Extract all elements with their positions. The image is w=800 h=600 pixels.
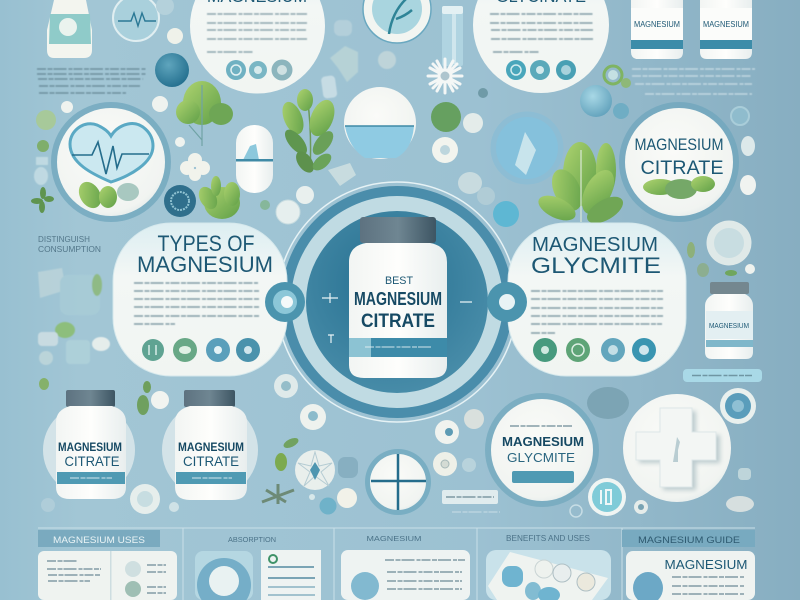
panel: magnesium glycinate bbox=[508, 223, 686, 376]
panel heading line 1: MAGNESIUM bbox=[532, 234, 658, 256]
bottle label: MAGNESIUM bbox=[634, 20, 680, 29]
icon: cyan D token bbox=[588, 478, 626, 516]
icon: leaf sprig bbox=[278, 89, 339, 176]
panel: top centre disc with leaf bbox=[363, 0, 431, 43]
top-left bottle bbox=[47, 0, 92, 58]
card bbox=[486, 550, 611, 600]
icon: heart with pulse bbox=[70, 124, 153, 182]
small token and pebble right bbox=[634, 468, 754, 514]
items below central disc bbox=[295, 404, 358, 514]
faint glyph stack left bbox=[34, 157, 48, 185]
header band bbox=[622, 530, 755, 547]
panel: top-left circle bbox=[190, 0, 325, 94]
blue pills bbox=[502, 560, 595, 600]
small pill bbox=[167, 28, 183, 44]
big blue textured disc bbox=[490, 112, 564, 184]
ring token centre-left bbox=[274, 374, 298, 398]
faint glassy icons bbox=[321, 20, 396, 99]
half-blue tablet bbox=[344, 87, 416, 159]
green ring bbox=[604, 66, 631, 88]
connector knob left bbox=[265, 282, 305, 322]
section 4 bbox=[486, 534, 611, 600]
panel body lines bbox=[531, 291, 663, 333]
blue sphere bbox=[155, 53, 189, 87]
dark textured disc bbox=[164, 185, 196, 217]
disc with white cross bbox=[623, 394, 731, 502]
header text: BENEFITS AND USES bbox=[506, 534, 590, 543]
bottle label: MAGNESIUM bbox=[703, 20, 749, 29]
top-right bottle 2 bbox=[700, 0, 752, 59]
disc: magnesium citrate bbox=[619, 102, 739, 222]
panel icons bbox=[533, 338, 656, 362]
body lines bbox=[490, 14, 593, 52]
panel: top-right circle bbox=[473, 0, 609, 93]
tablet with cross score bbox=[365, 449, 431, 515]
caption line 2: CONSUMPTION bbox=[38, 245, 101, 254]
open book card bbox=[38, 551, 177, 600]
book lines bbox=[47, 561, 101, 581]
section 5 bbox=[622, 530, 755, 600]
disc subtitle: GLYCMITE bbox=[507, 450, 575, 465]
ring token under bottles bbox=[41, 484, 179, 514]
panel: types of magnesium bbox=[113, 223, 287, 376]
disc subtitle: CITRATE bbox=[640, 158, 724, 179]
bottle subtitle: CITRATE bbox=[64, 453, 120, 469]
bottle title: MAGNESIUM bbox=[178, 440, 244, 454]
faint collage left bbox=[38, 268, 110, 365]
bottle text: MAGNESIUM bbox=[709, 323, 749, 330]
bottle subtitle: CITRATE bbox=[361, 311, 435, 332]
book icons bbox=[125, 561, 166, 597]
label plate bbox=[442, 490, 498, 504]
leaf and pill between bottles bbox=[137, 381, 169, 415]
top-right bottle 1 bbox=[631, 0, 683, 59]
leaves under heart bbox=[74, 178, 139, 212]
section 3 bbox=[341, 534, 470, 600]
circle icons bbox=[506, 60, 576, 80]
panel icons bbox=[142, 338, 260, 362]
small caption left: DISTINGUISH bbox=[38, 235, 90, 244]
faint text lines right bbox=[632, 69, 755, 94]
icon: green sprout left bbox=[176, 81, 233, 146]
header text: ABSORPTION bbox=[228, 535, 276, 544]
bottle title: MAGNESIUM bbox=[354, 289, 442, 309]
globe bbox=[351, 572, 379, 600]
bottle band lines bbox=[365, 346, 431, 348]
blue spheres bbox=[580, 85, 629, 119]
panel heading line 2: GLYCMITE bbox=[531, 253, 661, 278]
card lines bbox=[385, 560, 465, 589]
small white dots bbox=[61, 96, 185, 147]
green pellet bbox=[39, 378, 49, 390]
small pills centre-left bbox=[260, 163, 356, 224]
grey pebble bbox=[587, 387, 629, 419]
green leaf and plant mid-bottom bbox=[262, 436, 300, 504]
disc title: MAGNESIUM bbox=[502, 434, 584, 449]
right bottle bbox=[705, 282, 753, 359]
small tokens right of central disc bbox=[433, 409, 484, 476]
disc band bbox=[512, 471, 574, 483]
small flower pill bbox=[180, 153, 210, 181]
disc title: MAGNESIUM bbox=[634, 136, 724, 154]
blurred text lines left bbox=[37, 69, 146, 93]
greens bbox=[643, 176, 715, 199]
card icon bbox=[633, 572, 663, 600]
circle icons bbox=[226, 60, 292, 80]
connector knob right bbox=[487, 282, 527, 322]
small glyph marks bottom centre bbox=[452, 505, 582, 517]
central disc bbox=[277, 182, 517, 422]
icon: cross bbox=[636, 408, 716, 487]
small leaves above right bottle bbox=[687, 242, 755, 277]
tube bbox=[442, 6, 463, 66]
icon: heartbeat ring bbox=[113, 0, 174, 41]
white ring top of glycinate panel bbox=[706, 220, 752, 266]
card bbox=[341, 550, 470, 600]
capsule pill bbox=[236, 125, 273, 193]
teal ring token bbox=[720, 388, 756, 424]
green leaf cluster bbox=[195, 176, 240, 219]
bottom-left bottle 1 bbox=[43, 390, 135, 499]
panel heading line 2: MAGNESIUM bbox=[137, 252, 273, 277]
tilted tray bbox=[488, 552, 608, 600]
bottle subtitle: CITRATE bbox=[183, 453, 239, 469]
header band bbox=[38, 530, 160, 547]
body lines bbox=[207, 14, 307, 52]
small items right of centre top bbox=[431, 88, 519, 227]
card bbox=[626, 551, 755, 600]
header text: MAGNESIUM bbox=[366, 534, 422, 543]
bottom-left bottle 2 bbox=[162, 390, 258, 500]
panel body lines bbox=[134, 283, 260, 324]
card lines bbox=[672, 577, 745, 594]
header text: MAGNESIUM GUIDE bbox=[638, 535, 740, 545]
icon: big green leaves bbox=[535, 142, 627, 229]
tablet card bbox=[195, 551, 253, 600]
crosshair sparkles bbox=[322, 293, 472, 343]
heart disc bbox=[51, 102, 171, 222]
panel heading line 1: TYPES OF bbox=[158, 231, 254, 256]
central bottle bbox=[349, 217, 447, 378]
cross shadow bbox=[639, 411, 720, 490]
bottom divider line bbox=[38, 528, 755, 600]
doc card bbox=[261, 550, 321, 600]
green balls bbox=[36, 110, 56, 152]
section 2 bbox=[195, 535, 321, 600]
bottle word: best: BEST bbox=[385, 275, 413, 287]
small ring and drops right bbox=[731, 107, 756, 195]
small plant left bbox=[31, 187, 54, 213]
card title: MAGNESIUM bbox=[664, 557, 748, 572]
bottle title: MAGNESIUM bbox=[58, 440, 122, 454]
header text: MAGNESIUM USES bbox=[53, 535, 145, 545]
section 1 bbox=[38, 530, 177, 600]
icon: white gear bbox=[428, 59, 462, 93]
pill label right bbox=[683, 369, 762, 382]
disc: magnesium glycmite bbox=[485, 393, 599, 507]
small caption left bbox=[38, 235, 101, 254]
